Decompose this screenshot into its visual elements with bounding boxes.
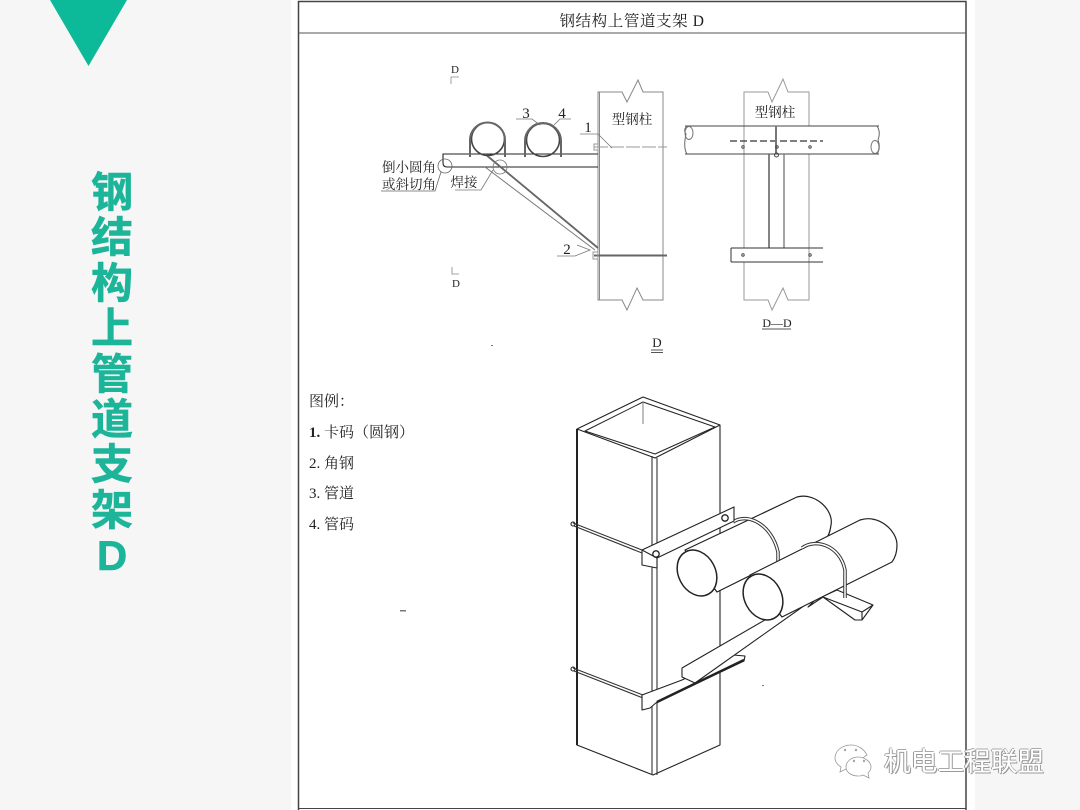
isometric drawing: [571, 397, 897, 775]
icon: teal triangle: [50, 0, 127, 66]
section labels: [651, 104, 796, 352]
vertical title: 架: [91, 487, 133, 534]
pipe front with clamp: [735, 519, 897, 627]
sheet frame: [298, 2, 966, 810]
pipe 3 with clamp: [470, 122, 505, 157]
side elevation labels: [382, 64, 653, 290]
lower strap: [573, 668, 643, 698]
vertical title: [91, 169, 133, 579]
legend: 图例：: [309, 393, 354, 410]
section pipe: [685, 126, 879, 154]
clamps on column: [593, 144, 667, 259]
vertical title: 结: [91, 214, 133, 261]
vertical title: 构: [91, 260, 133, 307]
side elevation drawing: [381, 77, 667, 310]
section dashed line: [730, 140, 823, 142]
side elevation labels: 3: [522, 106, 530, 122]
side elevation labels: 倒小圆角: [382, 160, 436, 175]
steel column: [598, 80, 663, 310]
angle arm: [443, 154, 598, 167]
section brace: [769, 126, 784, 248]
watermark text: 机电工程联盟: [884, 747, 1044, 777]
sheet title: 钢结构上管道支架 D: [559, 12, 705, 30]
leader lines: [516, 119, 612, 256]
section column: [744, 79, 809, 310]
side elevation labels: 4: [558, 106, 566, 122]
pipe rear with clamp: [669, 496, 831, 603]
upper angle plate: [642, 507, 734, 568]
legend: 2. 角钢: [309, 455, 354, 472]
vertical title: D: [97, 532, 127, 579]
vertical title: 钢: [91, 169, 133, 216]
legend: [309, 393, 414, 533]
section marks: [451, 77, 459, 274]
legend: 4. 管码: [309, 516, 354, 533]
vertical title: 支: [91, 441, 133, 488]
section labels: D—D: [762, 316, 792, 330]
diagonal brace: [485, 154, 598, 250]
callout: weld: [455, 160, 507, 190]
icon: wechat watermark: [835, 745, 871, 778]
side elevation labels: 焊接: [450, 174, 478, 190]
diagonal brace and lower angle: [642, 598, 815, 710]
section bottom plate: [731, 248, 823, 262]
scan specks: [400, 345, 764, 686]
section labels: 型钢柱: [755, 104, 796, 120]
top angle end: [808, 590, 873, 620]
section labels: D: [652, 335, 662, 350]
side elevation labels: 型钢柱: [612, 111, 653, 127]
callout: rounded corner: [381, 159, 452, 191]
side elevation labels: 1: [584, 120, 592, 136]
upper strap: [573, 523, 642, 553]
section D-D drawing: [685, 79, 879, 310]
vertical title: 管: [91, 351, 133, 398]
legend: 3. 管道: [309, 485, 354, 502]
side elevation labels: 或斜切角: [382, 177, 436, 192]
vertical title: 上: [91, 305, 133, 352]
vertical title: 道: [91, 396, 133, 443]
square column: [577, 397, 720, 775]
bolt holes: [742, 146, 811, 256]
side elevation labels: D: [452, 278, 460, 290]
pipe 4 with clamp: [525, 123, 561, 157]
legend: 1. 卡码（圆钢）: [309, 423, 414, 441]
side elevation labels: 2: [563, 242, 571, 258]
side elevation labels: D: [451, 64, 459, 76]
